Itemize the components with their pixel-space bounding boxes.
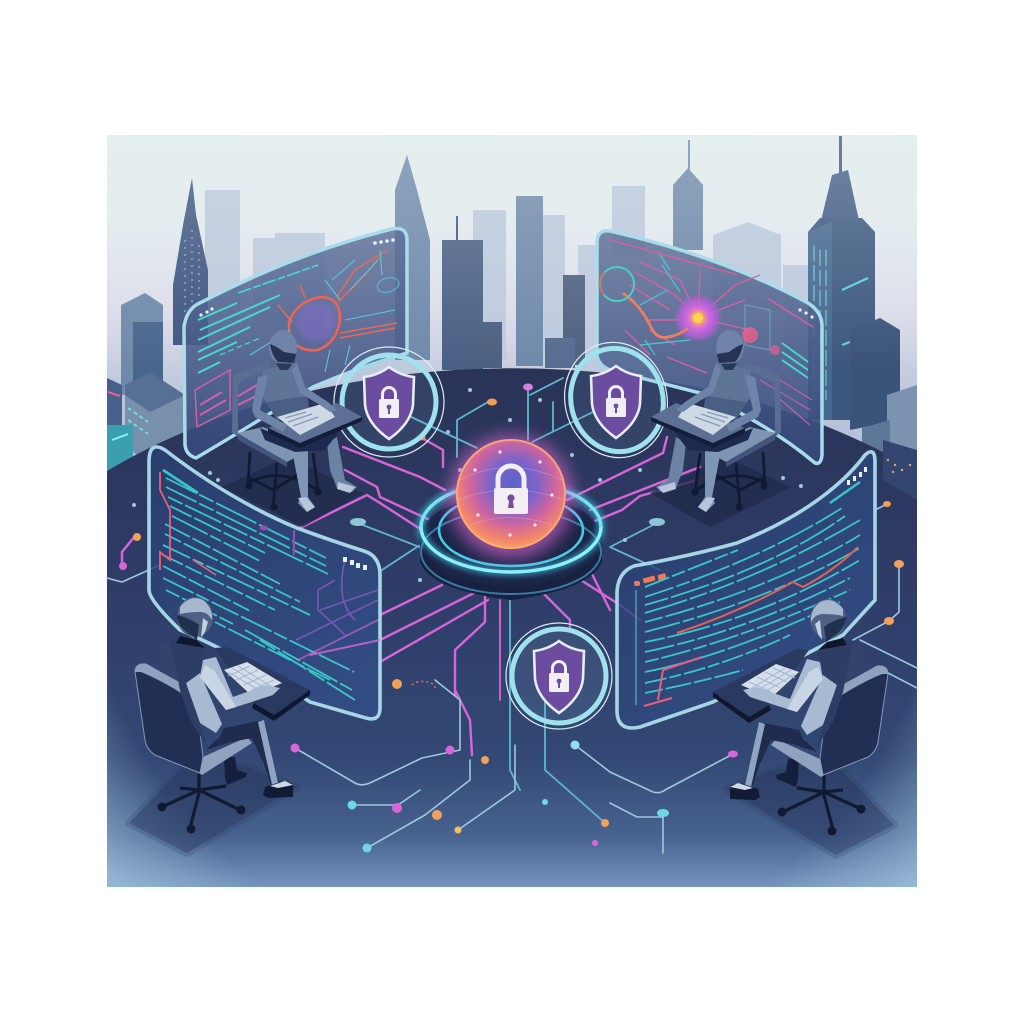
window controls: [634, 573, 667, 586]
big right tower: [808, 136, 917, 510]
pedestal: [420, 530, 602, 600]
panel: upper left screen: [184, 228, 407, 458]
padlock icon: [494, 466, 528, 514]
neural burst: [600, 240, 813, 425]
left base buildings: [107, 372, 185, 478]
operator: upper left: [222, 330, 363, 527]
panel: upper right screen: [597, 231, 822, 463]
central lock orb on pedestal: [419, 435, 603, 600]
red network blob: [250, 250, 400, 372]
operator: lower right: [713, 599, 894, 855]
mid towers: [121, 140, 703, 395]
pale network: [107, 504, 917, 853]
pink code box: [195, 370, 262, 427]
security shield: upper right: [552, 331, 680, 469]
front ring arc: [421, 527, 601, 572]
dark towers: [133, 178, 585, 392]
far pale towers: [205, 186, 808, 360]
orb glow: [449, 435, 573, 559]
panel: lower right code screen: [617, 452, 875, 728]
city skyline: [107, 135, 917, 510]
glow rings: [421, 482, 601, 594]
operator: upper right: [650, 330, 791, 527]
orb: [456, 439, 566, 549]
magenta traces: [122, 437, 700, 755]
skyline haze: [107, 135, 917, 370]
floor nodes: [119, 384, 904, 852]
security shield: upper left: [334, 347, 444, 457]
right edge distant district: [883, 440, 917, 500]
operator: lower left: [129, 597, 310, 853]
code lines: [645, 482, 860, 693]
circular floor: [107, 368, 917, 887]
circuit traces on floor: [107, 378, 917, 853]
code lines: [163, 470, 355, 700]
security shield: bottom: [506, 623, 612, 729]
panel: lower left code screen: [149, 447, 380, 719]
background sky panel: [107, 135, 917, 887]
cyan traces: [355, 378, 660, 823]
code lines: [198, 265, 318, 373]
